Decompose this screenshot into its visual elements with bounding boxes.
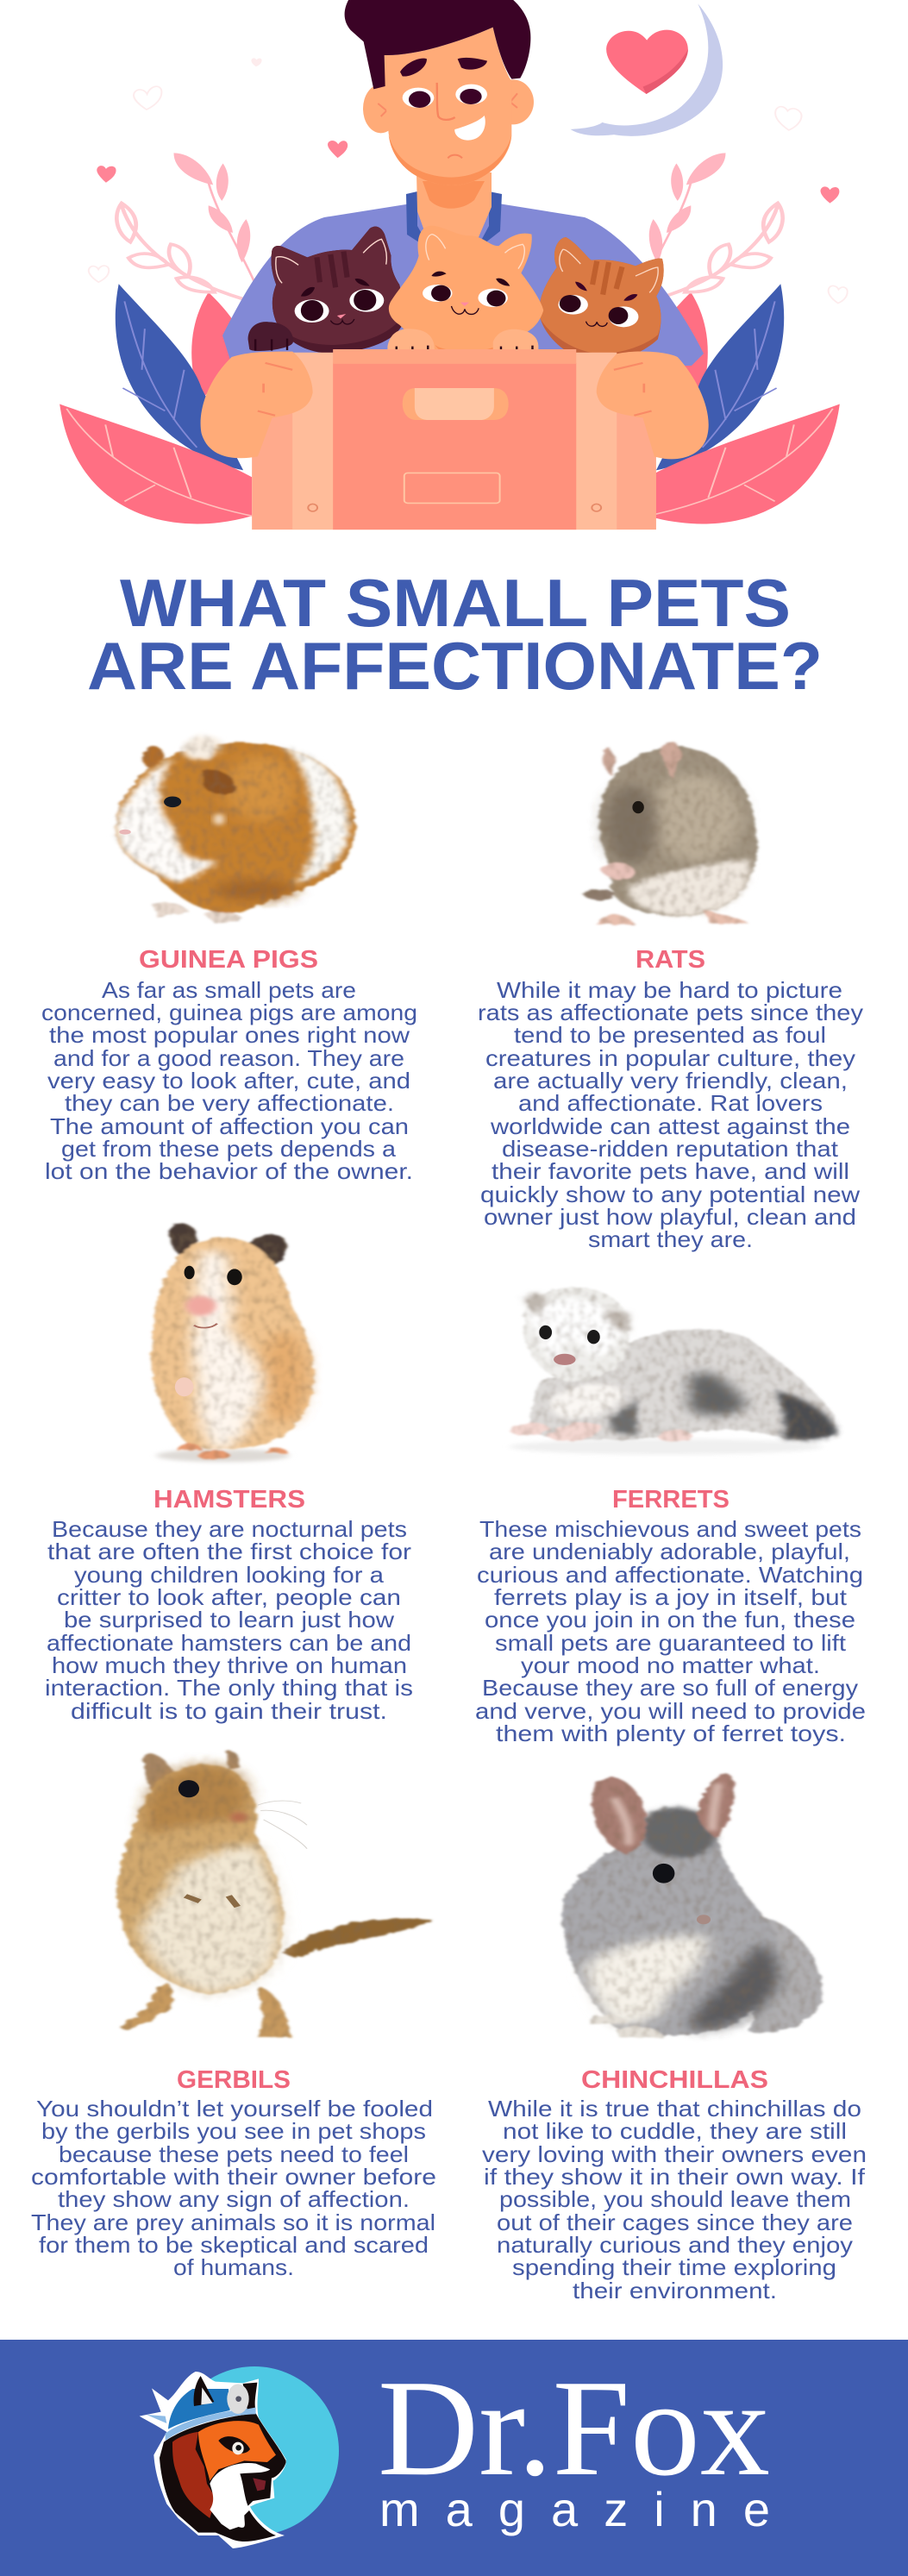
body text: While it is true that chinchillas do xyxy=(488,2096,861,2122)
photo: hamster xyxy=(151,1223,314,1462)
title: ARE AFFECTIONATE? xyxy=(87,628,823,704)
body text: disease-ridden reputation that xyxy=(502,1136,839,1162)
title xyxy=(87,565,823,704)
body text: ferrets play is a joy in itself, but xyxy=(494,1584,848,1610)
right hand xyxy=(597,351,709,459)
photo: rat xyxy=(582,741,757,924)
body text: spending their time exploring xyxy=(512,2254,836,2280)
man shirt xyxy=(222,204,704,366)
body text: affectionate hamsters can be and xyxy=(47,1630,411,1656)
cat: orange right xyxy=(539,237,664,362)
body text: and affectionate. Rat lovers xyxy=(518,1090,823,1116)
left hand xyxy=(201,352,313,458)
body text: their favorite pets have, and will xyxy=(492,1158,849,1184)
photo: gerbil xyxy=(116,1751,431,2038)
body text: These mischievous and sweet pets xyxy=(479,1516,861,1542)
three kittens xyxy=(248,226,664,362)
body text: they show any sign of affection. xyxy=(58,2186,410,2212)
body text: quickly show to any potential new xyxy=(480,1181,860,1207)
body text: interaction. The only thing that is xyxy=(45,1675,413,1701)
body text xyxy=(31,2096,436,2280)
body text: be surprised to learn just how xyxy=(64,1607,394,1633)
body text: how much they thrive on human xyxy=(52,1652,407,1678)
body text: The amount of affection you can xyxy=(50,1113,409,1139)
body text: and for a good reason. They are xyxy=(53,1045,404,1071)
body text: your mood no matter what. xyxy=(521,1652,820,1678)
body text: naturally curious and they enjoy xyxy=(497,2232,853,2258)
body text: creatures in popular culture, they xyxy=(485,1045,855,1071)
body text: owner just how playful, clean and xyxy=(484,1204,856,1230)
panel: ferrets xyxy=(475,1288,866,1746)
logo: cyan circle xyxy=(170,2366,339,2535)
body text xyxy=(482,2096,867,2303)
body text: small pets are guaranteed to lift xyxy=(495,1630,847,1656)
left leaves and sprigs xyxy=(59,153,255,523)
logo: fox head xyxy=(140,2372,286,2548)
body text: difficult is to gain their trust. xyxy=(71,1698,387,1724)
heading: FERRETS xyxy=(612,1486,730,1514)
body text: they can be very affectionate. xyxy=(65,1090,394,1116)
body text: lot on the behavior of the owner. xyxy=(45,1158,413,1184)
body text: Because they are nocturnal pets xyxy=(52,1516,407,1542)
body text: of humans. xyxy=(173,2254,294,2280)
body text: concerned, guinea pigs are among xyxy=(41,1000,417,1025)
body text xyxy=(41,977,417,1184)
box xyxy=(252,349,656,530)
body text xyxy=(478,977,863,1252)
panel: hamsters xyxy=(45,1223,413,1724)
body text: very loving with their owners even xyxy=(482,2141,867,2167)
body text: As far as small pets are xyxy=(102,977,356,1003)
body text: because these pets need to feel xyxy=(59,2141,409,2167)
body text: get from these pets depends a xyxy=(61,1136,397,1162)
body text: curious and affectionate. Watching xyxy=(477,1562,863,1588)
neck shadow xyxy=(423,181,485,209)
body text: and verve, you will need to provide xyxy=(475,1698,866,1724)
body text: for them to be skeptical and scared xyxy=(39,2232,429,2258)
shirt collar xyxy=(406,191,502,250)
title: WHAT SMALL PETS xyxy=(120,565,791,641)
logo wordmark: Dr.Fox xyxy=(378,2351,770,2504)
heading: GUINEA PIGS xyxy=(139,946,318,974)
faint hearts xyxy=(89,58,848,304)
body text: tend to be presented as foul xyxy=(514,1022,826,1048)
heading: HAMSTERS xyxy=(153,1486,305,1514)
body text: if they show it in their own way. If xyxy=(484,2164,866,2190)
body text: that are often the first choice for xyxy=(47,1539,411,1564)
body text: very easy to look after, cute, and xyxy=(47,1068,410,1094)
body text xyxy=(475,1516,866,1746)
body text xyxy=(45,1516,413,1724)
heading: RATS xyxy=(636,946,705,974)
photo: guinea pig xyxy=(116,736,355,924)
man head xyxy=(345,0,534,185)
cat: ginger middle xyxy=(387,226,543,360)
body text: You shouldn’t let yourself be fooled xyxy=(36,2096,433,2122)
footer band xyxy=(0,2340,908,2576)
body text: They are prey animals so it is normal xyxy=(31,2209,435,2235)
heading: CHINCHILLAS xyxy=(581,2066,768,2094)
body text: comfortable with their owner before xyxy=(31,2164,436,2190)
heading: GERBILS xyxy=(177,2066,291,2094)
body text: worldwide can attest against the xyxy=(490,1113,850,1139)
body text: the most popular ones right now xyxy=(49,1022,410,1048)
neck xyxy=(416,172,492,250)
body text: While it may be hard to picture xyxy=(497,977,842,1003)
panel: gerbils xyxy=(31,1751,436,2280)
body text: not like to cuddle, they are still xyxy=(503,2118,847,2144)
body text: once you join in on the fun, these xyxy=(485,1607,855,1633)
speech bubble with heart xyxy=(571,3,723,136)
panel: chinchillas xyxy=(482,1774,867,2303)
small hearts xyxy=(97,141,839,204)
body text: rats as affectionate pets since they xyxy=(478,1000,863,1025)
panel: guinea pigs xyxy=(41,736,417,1184)
body text: them with plenty of ferret toys. xyxy=(496,1720,846,1746)
body text: possible, you should leave them xyxy=(499,2186,851,2212)
body text: smart they are. xyxy=(588,1226,753,1252)
body text: by the gerbils you see in pet shops xyxy=(41,2118,426,2144)
body text: young children looking for a xyxy=(74,1562,385,1588)
body text: critter to look after, people can xyxy=(57,1584,401,1610)
panel: rats xyxy=(478,741,863,1252)
body text: their environment. xyxy=(573,2278,777,2303)
hero illustration xyxy=(59,0,848,530)
photo: chinchilla xyxy=(561,1774,823,2038)
body text: are actually very friendly, clean, xyxy=(493,1068,848,1094)
right leaves and sprigs xyxy=(644,153,840,523)
body text: out of their cages since they are xyxy=(497,2209,853,2235)
body text: Because they are so full of energy xyxy=(482,1675,858,1701)
photo: ferret xyxy=(510,1288,836,1455)
body text: are undeniably adorable, playful, xyxy=(489,1539,850,1564)
cat: dark left xyxy=(248,227,403,354)
logo subtitle: magazine xyxy=(379,2482,770,2536)
